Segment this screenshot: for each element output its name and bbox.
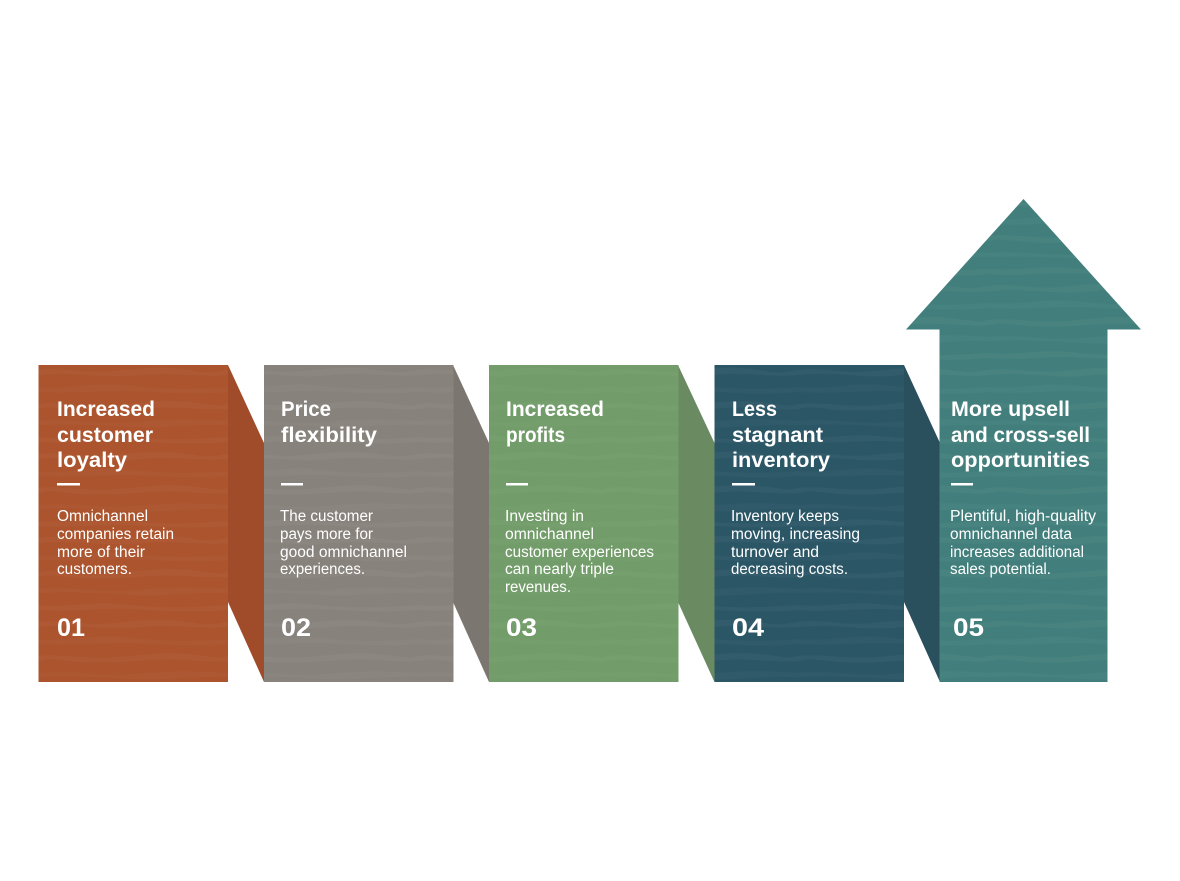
connector 4	[904, 365, 940, 682]
body text 4	[731, 508, 860, 578]
divider 1	[57, 483, 80, 486]
block 1	[38, 365, 228, 682]
panel 1: increased customer loyalty	[38, 365, 264, 682]
body text 1: more of their	[57, 544, 145, 561]
body text 1	[57, 508, 174, 578]
body text 3	[505, 508, 654, 596]
panel 3: increased profits	[489, 365, 714, 682]
body text 4: Inventory keeps	[731, 508, 839, 525]
heading 1: Increased	[57, 398, 155, 421]
body text 2: experiences.	[280, 561, 365, 578]
body text 2: good omnichannel	[280, 544, 407, 561]
heading 2: flexibility	[281, 424, 377, 447]
heading 4: Less	[732, 398, 777, 421]
panel 2: price flexibility	[264, 365, 489, 682]
heading 4: stagnant	[732, 424, 823, 447]
body text 5: omnichannel data	[950, 526, 1072, 543]
body text 1: Omnichannel	[57, 508, 148, 525]
heading 3: Increased	[506, 398, 604, 421]
divider 2	[281, 483, 303, 486]
body text 3: omnichannel	[505, 526, 594, 543]
divider 3	[506, 483, 528, 486]
heading 4	[732, 398, 830, 472]
block 3	[489, 365, 678, 682]
number 01: 01	[57, 614, 85, 642]
heading 2	[281, 398, 377, 447]
panel 5: more upsell and cross-sell opportunities	[906, 199, 1141, 682]
heading 5: opportunities	[951, 449, 1090, 472]
heading 5: More upsell	[951, 398, 1070, 421]
heading 1	[57, 398, 155, 472]
body text 3: can nearly triple	[505, 561, 614, 578]
connector 2	[453, 365, 489, 682]
heading 4: inventory	[732, 449, 830, 472]
body text 5: increases additional	[950, 544, 1084, 561]
heading 5	[951, 398, 1090, 472]
heading 1: loyalty	[57, 449, 127, 472]
number 05: 05	[953, 614, 984, 642]
connector 3	[678, 365, 714, 682]
body text 1: customers.	[57, 561, 132, 578]
heading 1: customer	[57, 424, 153, 447]
heading 5: and cross-sell	[951, 424, 1090, 447]
block 2	[264, 365, 454, 682]
divider 4	[732, 483, 755, 486]
body text 4: moving, increasing	[731, 526, 860, 543]
body text 2	[280, 508, 407, 578]
body text 1: companies retain	[57, 526, 174, 543]
heading 2: Price	[281, 398, 331, 421]
number 02: 02	[281, 614, 311, 642]
body text 3: revenues.	[505, 579, 571, 596]
body text 2: pays more for	[280, 526, 373, 543]
body text 5: Plentiful, high-quality	[950, 508, 1096, 525]
arrow block 5	[906, 199, 1141, 682]
connector 1	[228, 365, 264, 682]
heading 3	[506, 398, 604, 447]
body text 3: customer experiences	[505, 544, 654, 561]
body text 2: The customer	[280, 508, 373, 525]
divider 5	[951, 483, 973, 486]
number 04: 04	[732, 614, 764, 642]
block 4	[714, 365, 904, 682]
body text 3: Investing in	[505, 508, 584, 525]
number 03: 03	[506, 614, 537, 642]
body text 5: sales potential.	[950, 561, 1051, 578]
body text 4: decreasing costs.	[731, 561, 848, 578]
heading 3: profits	[506, 424, 565, 447]
panel 4: less stagnant inventory	[714, 365, 940, 682]
body text 4: turnover and	[731, 544, 819, 561]
body text 5	[950, 508, 1096, 578]
